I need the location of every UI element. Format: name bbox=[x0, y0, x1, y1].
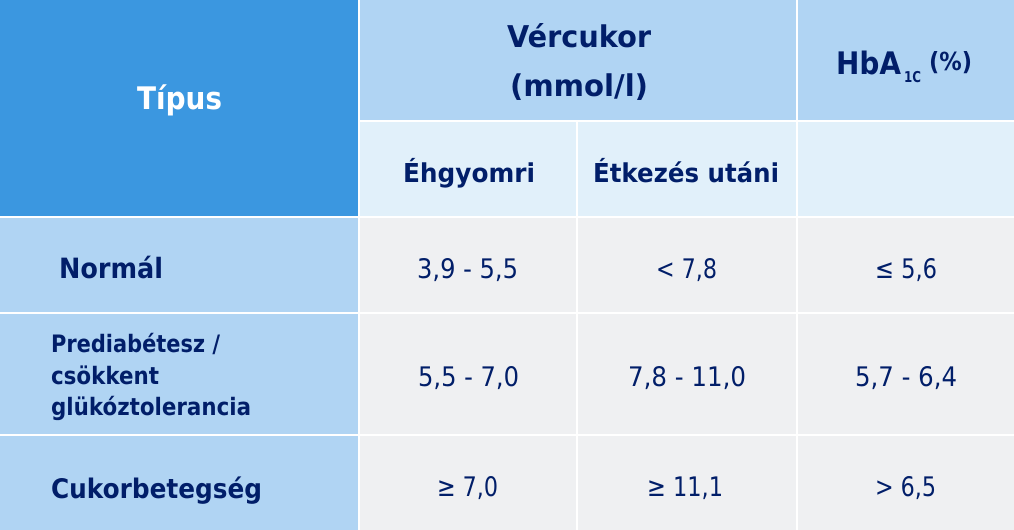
value cell: diabetes postprandial bbox=[578, 436, 796, 530]
value cell: prediabetes fasting: 5,5 - 7,0 bbox=[418, 362, 519, 393]
subheader: Éhgyomri: Éhgyomri bbox=[403, 157, 535, 189]
value cell: normal fasting: 3,9 - 5,5 bbox=[417, 254, 518, 285]
header cell: Típus bbox=[0, 0, 358, 216]
row label: Prediabétesz bbox=[0, 314, 358, 434]
value cell: diabetes fasting bbox=[360, 436, 576, 530]
value cell: diabetes postprandial: ≥ 11,1 bbox=[647, 472, 723, 503]
subheader: Étkezés utáni: Étkezés utáni bbox=[593, 157, 779, 189]
header cell: Típus: Típus bbox=[137, 81, 222, 117]
header cell: HbA1c (%): (%) bbox=[929, 47, 972, 76]
header cell: Vércukor (mmol/l): Vércukor bbox=[507, 20, 651, 55]
row label: Prediabétesz: glükóztolerancia bbox=[51, 393, 251, 421]
value cell: prediabetes postprandial: 7,8 - 11,0 bbox=[628, 362, 746, 393]
row label: Prediabétesz: csökkent bbox=[51, 362, 159, 390]
header cell: Vércukor (mmol/l) bbox=[360, 0, 796, 120]
subheader: empty bbox=[798, 122, 1014, 216]
value cell: prediabetes postprandial bbox=[578, 314, 796, 434]
header cell: Vércukor (mmol/l): (mmol/l) bbox=[510, 69, 648, 104]
row label: Cukorbetegség bbox=[0, 436, 358, 530]
subheader: Étkezés utáni bbox=[578, 122, 796, 216]
header cell: HbA1c (%) bbox=[798, 0, 1014, 120]
value cell: normal postprandial bbox=[578, 218, 796, 312]
row label: Prediabétesz: Prediabétesz / bbox=[51, 330, 220, 358]
subheader: Éhgyomri bbox=[360, 122, 576, 216]
value cell: prediabetes fasting bbox=[360, 314, 576, 434]
row label: Normál bbox=[0, 218, 358, 312]
value cell: prediabetes HbA1c: 5,7 - 6,4 bbox=[855, 362, 957, 393]
value cell: prediabetes HbA1c bbox=[798, 314, 1014, 434]
value cell: normal postprandial: < 7,8 bbox=[656, 254, 717, 285]
row label: Cukorbetegség: Cukorbetegség bbox=[51, 474, 262, 505]
value cell: normal HbA1c: ≤ 5,6 bbox=[875, 254, 937, 285]
value cell: diabetes HbA1c: > 6,5 bbox=[875, 472, 936, 503]
value cell: diabetes HbA1c bbox=[798, 436, 1014, 530]
header cell: HbA1c (%): HbA bbox=[836, 46, 901, 82]
value cell: normal HbA1c bbox=[798, 218, 1014, 312]
header cell: HbA1c (%): 1C bbox=[904, 68, 921, 86]
value cell: normal fasting bbox=[360, 218, 576, 312]
value cell: diabetes fasting: ≥ 7,0 bbox=[437, 472, 498, 503]
row label: Normál: Normál bbox=[59, 252, 163, 285]
